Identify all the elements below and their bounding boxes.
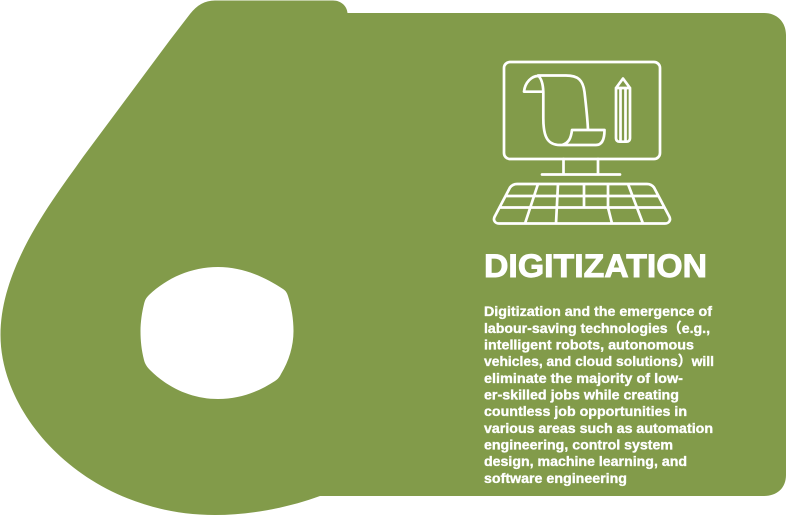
icon: computer with document and pencil bbox=[494, 62, 670, 224]
description text block: eliminate the majority of low- bbox=[484, 370, 683, 386]
description text block: Digitization and the emergence of bbox=[484, 303, 712, 319]
description text block: vehicles, and cloud solutions）will bbox=[484, 353, 714, 369]
description text block: er-skilled jobs while creating bbox=[484, 386, 679, 402]
description text block: various areas such as automation bbox=[484, 420, 713, 436]
icon part: keyboard bbox=[494, 184, 670, 224]
title: DIGITIZATION bbox=[484, 248, 707, 284]
description text block: engineering, control system bbox=[484, 436, 673, 452]
description text block: software engineering bbox=[484, 470, 627, 486]
icon part: document scroll bbox=[524, 76, 604, 145]
icon part: monitor bbox=[504, 62, 660, 159]
icon part: monitor stand bbox=[542, 159, 620, 174]
description text block: intelligent robots, autonomous bbox=[484, 336, 694, 352]
description text block: countless job opportunities in bbox=[484, 403, 687, 419]
description text block: labour-saving technologies（e.g., bbox=[484, 320, 710, 336]
description text block: design, machine learning, and bbox=[484, 453, 687, 469]
description text block bbox=[484, 303, 714, 486]
icon part: pencil bbox=[616, 78, 630, 142]
